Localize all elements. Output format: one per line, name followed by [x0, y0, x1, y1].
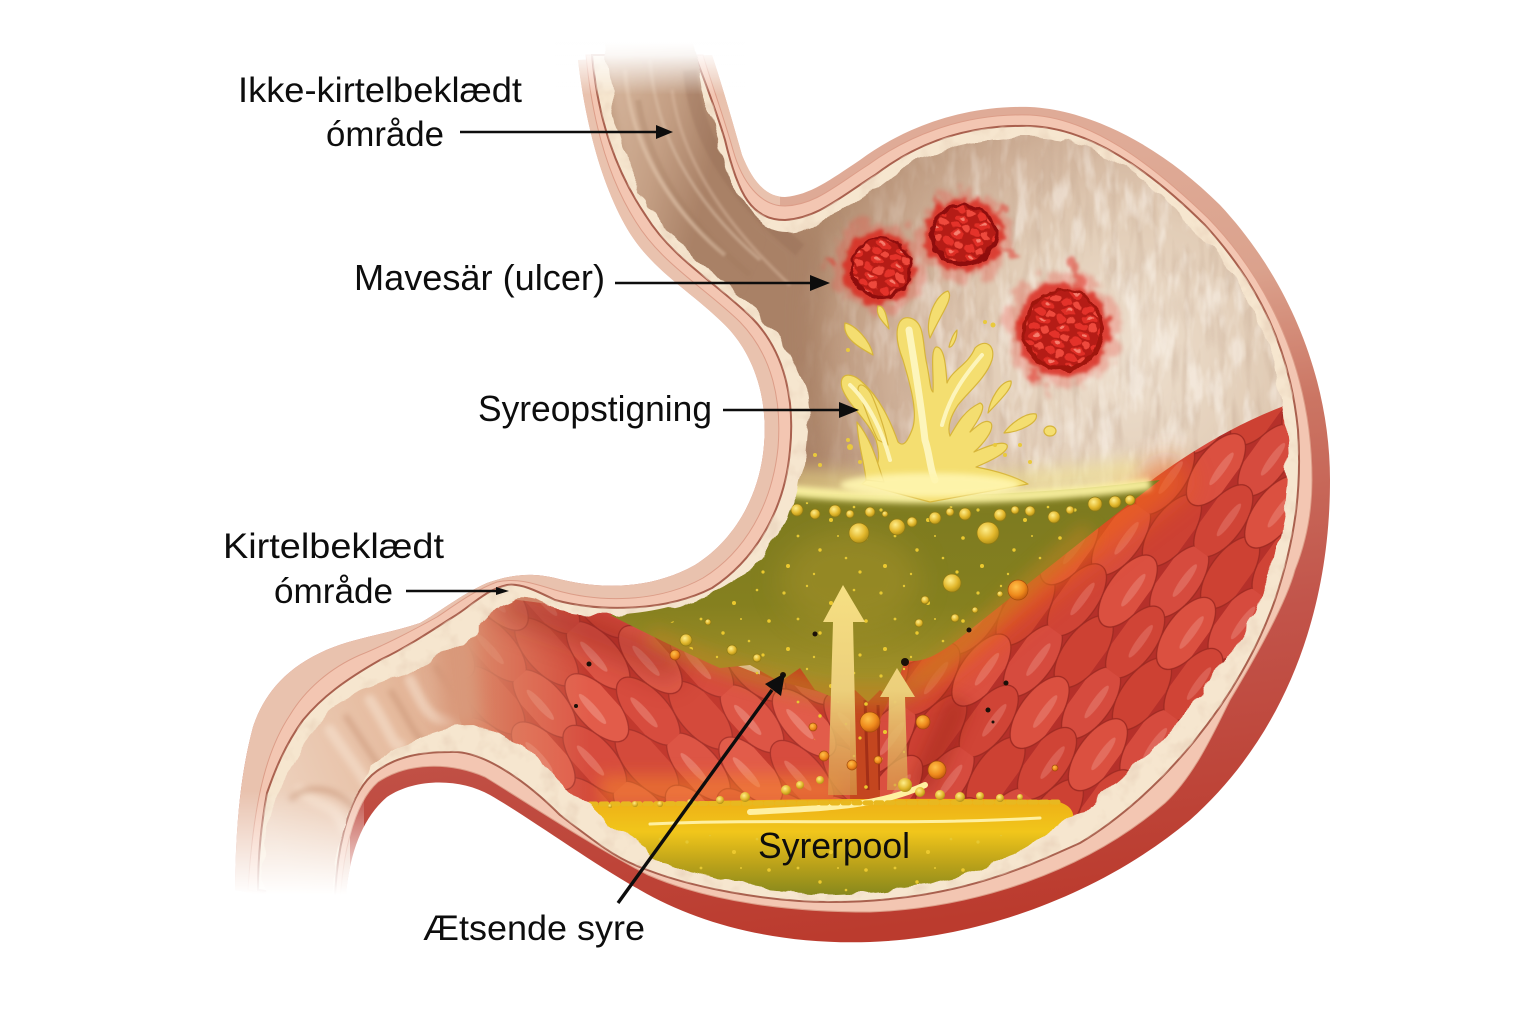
splash highlight streaks — [909, 330, 935, 480]
ulcer two — [930, 204, 998, 266]
duodenum fold shadows — [288, 690, 424, 810]
mucosa surface texture — [823, 135, 1283, 480]
left fold fade into duodenum — [460, 600, 578, 796]
splash drop five — [1004, 414, 1037, 433]
duodenum folds — [300, 680, 450, 830]
ulcers — [829, 189, 1121, 388]
top fade — [555, 0, 745, 95]
left gastric folds — [462, 600, 850, 805]
orange bubbles — [670, 580, 1058, 779]
stomach cavity contents — [264, 50, 1290, 895]
ulcer streaks — [829, 200, 1082, 382]
ulcer one — [850, 237, 912, 299]
acid pool — [592, 798, 1074, 895]
esophagus lumen core — [595, 0, 760, 290]
pink muscle layer — [248, 55, 1312, 912]
splash droplets — [813, 320, 1032, 467]
warm acid edge — [650, 530, 1090, 695]
label: Ætsende syre: Ætsende syre — [423, 909, 645, 948]
label: Ikke-kirtelbeklædt område: ómråde — [326, 115, 444, 154]
upper stomach mucosa — [610, 79, 1283, 493]
label: Ikke-kirtelbeklædt område — [238, 71, 522, 154]
splash drop six — [988, 381, 1011, 413]
label: Syreopstigning: Syreopstigning — [478, 388, 712, 429]
orange shading beside acid — [905, 470, 1180, 680]
arrow to ulcer — [615, 275, 830, 291]
splash drop four — [949, 330, 957, 347]
shading at stomach folds — [920, 700, 960, 790]
pool surface highlights — [590, 785, 1060, 824]
label: Kirtelbeklædt område — [223, 527, 444, 611]
central red wedges — [864, 700, 880, 790]
acid splash — [841, 291, 1056, 502]
arrow to non-glandular area — [460, 125, 673, 139]
splash tendril left — [858, 385, 888, 445]
stomach illustration — [220, 0, 1360, 942]
label: Syrerpool: Syrerpool — [758, 825, 910, 866]
splash drop one — [845, 323, 873, 355]
acid surface band — [785, 484, 1150, 498]
esophagus lumen — [610, 72, 821, 452]
pale outer wall on esophagus and duodenum — [220, 40, 780, 920]
splash drop seven — [1044, 426, 1056, 436]
label: Kirtelbeklædt område: ómråde — [274, 572, 393, 611]
ulcer wide halos — [832, 189, 1121, 388]
splash drop two — [877, 306, 889, 329]
central tissue base — [760, 668, 889, 799]
left fold warm lower shading — [600, 775, 840, 805]
splash highlight right — [942, 355, 982, 425]
label: Mavesär (ulcer): Mavesär (ulcer) — [354, 257, 605, 298]
ulcer three — [1022, 289, 1104, 371]
label: Ikke-kirtelbeklædt område: Ikke-kirtelbeklædt — [238, 71, 522, 110]
label: Kirtelbeklædt område: Kirtelbeklædt — [223, 527, 444, 566]
cream inner lining — [258, 55, 1299, 902]
small rising arrow — [880, 668, 915, 790]
splash highlight left — [850, 385, 890, 460]
esophagus streaks — [625, 60, 800, 285]
arrow to glandular area — [406, 587, 509, 595]
acid liquid — [610, 480, 1160, 702]
lower left fade — [222, 780, 364, 925]
left fold dark top shading — [500, 600, 680, 670]
arrow to corrosive acid — [618, 673, 785, 903]
pool droplets — [658, 835, 1002, 892]
splash base glow — [840, 473, 1020, 497]
blend between duodenum and folds — [452, 610, 462, 725]
acid surface glow above — [790, 470, 1140, 486]
ulcer tight halos — [843, 199, 1110, 377]
cream lining texture — [258, 55, 1299, 902]
arrow to acid reflux — [723, 402, 859, 418]
splash drop three — [928, 291, 950, 338]
large rising arrow — [823, 585, 865, 795]
bubbles near pool — [608, 776, 1023, 808]
outer stomach wall — [235, 55, 1330, 942]
right gastric folds — [880, 406, 1290, 816]
black corrosion specks — [574, 628, 1008, 724]
bubbles in acid — [680, 495, 1135, 662]
duodenum lumen — [264, 596, 545, 860]
splash tendril far left — [857, 422, 884, 482]
acid swirl — [780, 530, 920, 630]
acid tiny droplets — [670, 502, 1077, 789]
splash main body — [841, 318, 1028, 502]
